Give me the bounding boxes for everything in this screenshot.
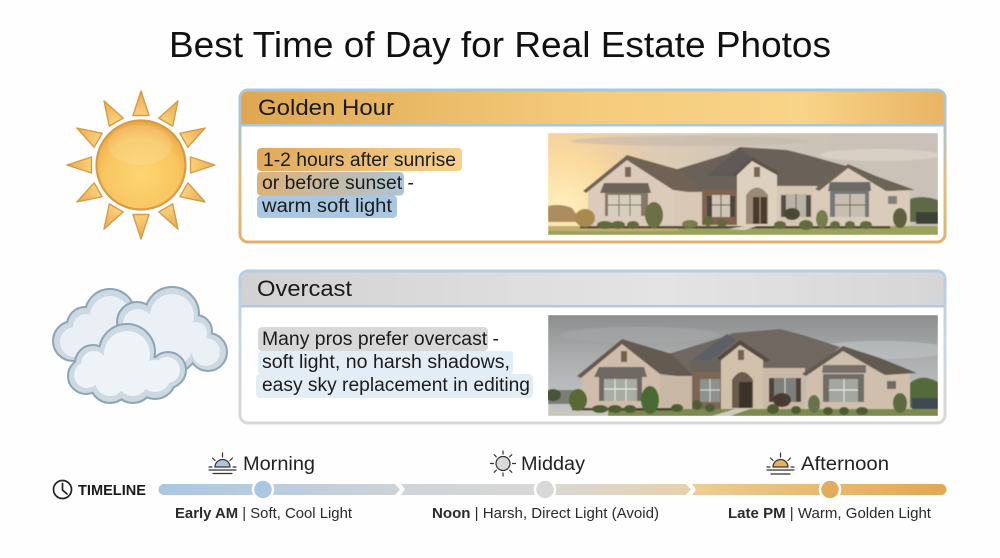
left wing wall and roof [588, 160, 663, 226]
golden hour highlighted text: warm soft light [261, 196, 393, 217]
icon: midday sun [490, 451, 516, 476]
panel: golden hour [240, 90, 945, 242]
shrubs [569, 386, 907, 415]
brick section and window [702, 189, 738, 225]
background trees [548, 390, 574, 404]
ground [548, 226, 938, 235]
overcast highlighted text: easy sky replacement in editing [262, 375, 530, 396]
marker: midday [535, 480, 555, 500]
label: midday: Midday [521, 454, 586, 475]
icon: clouds [54, 288, 226, 402]
main roof [665, 329, 840, 376]
panel: overcast [240, 271, 950, 423]
overcast heading: Overcast [257, 276, 352, 301]
label: afternoon: Afternoon [801, 454, 889, 475]
back-left cloud [54, 290, 134, 360]
center gable and entry [721, 342, 763, 410]
photo: house at golden hour [548, 133, 940, 235]
caption: early AM: Early AM | Soft, Cool Light [175, 506, 352, 522]
caption: late PM: Late PM | Warm, Golden Light [728, 506, 931, 522]
photo: house under overcast sky [545, 315, 950, 416]
upper gable [708, 149, 750, 176]
left window [600, 183, 651, 193]
marker: afternoon [820, 480, 840, 500]
golden hour highlighted text [257, 148, 462, 218]
icon: sunrise [209, 453, 236, 474]
right section wall [763, 368, 805, 410]
right wing [813, 166, 910, 227]
background trees [548, 205, 582, 222]
golden hour header band [242, 92, 944, 125]
golden hour heading: Golden Hour [258, 95, 394, 120]
caption: noon: Noon | Harsh, Direct Light (Avoid) [432, 506, 659, 522]
shrubs [575, 202, 907, 230]
overcast highlighted text: Many pros prefer overcast - [262, 329, 499, 350]
right section wall [777, 186, 817, 226]
upper gable [693, 334, 736, 360]
left wing wall and roof [582, 342, 660, 410]
left window [594, 367, 647, 377]
title: Best Time of Day for Real Estate Photos [169, 24, 831, 65]
center gable and entry [737, 160, 777, 226]
golden hour highlighted text: 1-2 hours after sunrise [263, 150, 456, 171]
label: morning: Morning [243, 454, 315, 475]
timeline [54, 451, 946, 522]
icon: sun [67, 91, 215, 239]
overcast highlighted text [256, 327, 533, 398]
icon: clock [54, 480, 72, 498]
timeline bar [158, 480, 946, 500]
timeline label: TIMELINE [78, 483, 146, 499]
marker: morning [253, 480, 273, 500]
overcast highlighted text: soft light, no harsh shadows, [262, 352, 510, 373]
front cloud [69, 325, 185, 402]
icon: sunset [767, 453, 794, 474]
main roof [668, 147, 850, 192]
overcast header band [242, 272, 944, 306]
brick section and window [692, 372, 722, 410]
golden hour highlighted text: or before sunset - [262, 173, 414, 194]
ground [548, 409, 938, 416]
right wing [806, 349, 910, 410]
back-right cloud [118, 288, 226, 373]
